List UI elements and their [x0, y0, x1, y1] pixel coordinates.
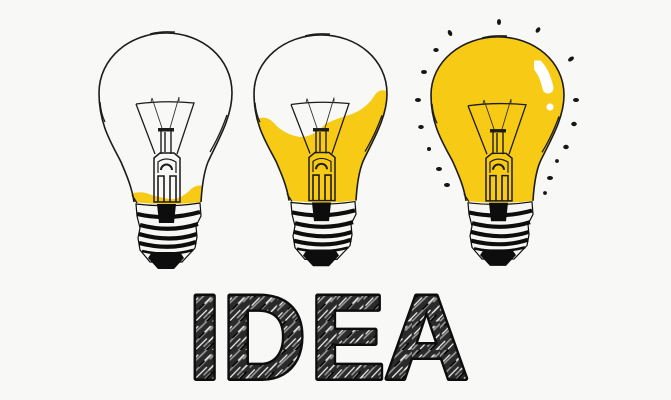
icon: radiating light dots [415, 19, 579, 195]
bulb 3: fully lit [430, 35, 565, 266]
yellow liquid low [133, 186, 202, 204]
yellow liquid middle [255, 90, 390, 204]
yellow full fill [432, 38, 564, 203]
bulb 1: nearly empty [99, 32, 232, 269]
title: IDEA [188, 270, 469, 400]
icon: highlight on lit bulb [535, 63, 554, 111]
bulb 2: half full [254, 34, 390, 266]
